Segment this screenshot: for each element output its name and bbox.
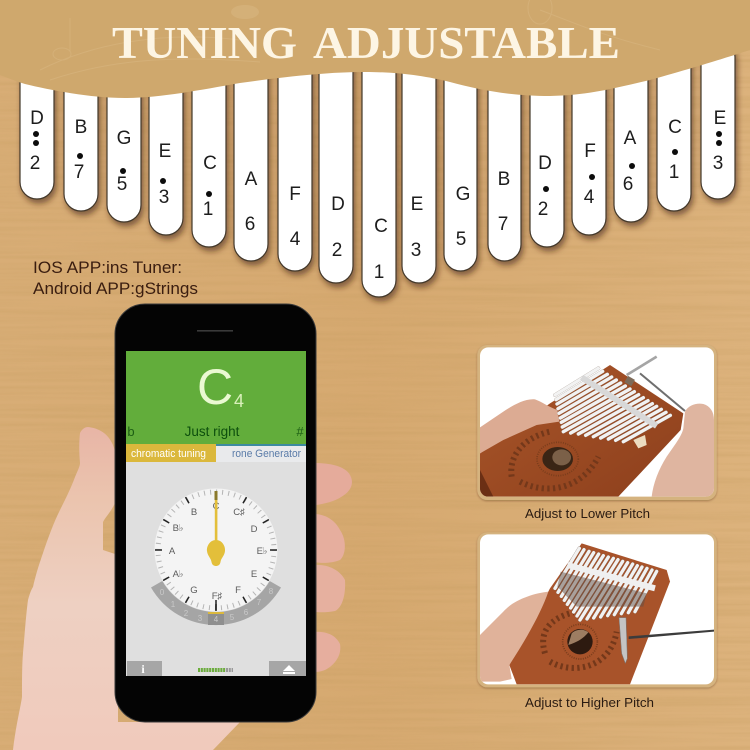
- tuning dial: F: [235, 585, 241, 596]
- palm and thumb: [13, 427, 240, 750]
- key F 4 dotted: [572, 40, 606, 235]
- key E 3: 3: [411, 240, 421, 261]
- key A 6 dotted: [614, 40, 648, 222]
- key A 6: A: [245, 169, 258, 190]
- key D 2 dotted: 2: [538, 199, 548, 220]
- key G 5: [444, 40, 477, 271]
- key E 3: [402, 40, 436, 283]
- octave scale arc: 5: [230, 613, 235, 622]
- kalimba body: [509, 543, 670, 684]
- title: [112, 17, 620, 68]
- info button: i: [141, 662, 145, 676]
- tuning dial: A♭: [173, 569, 183, 580]
- octave scale arc: 3: [198, 614, 203, 623]
- caption: higher pitch: Adjust to Higher Pitch: [525, 696, 654, 710]
- tuning wrench: [619, 618, 714, 663]
- key C 1: 1: [203, 199, 213, 220]
- wreath and sound hole: [511, 432, 598, 489]
- tuning dial: B♭: [173, 523, 183, 534]
- banner music staff decoration: [40, 0, 660, 80]
- key D 2: [319, 40, 353, 283]
- key G 5: 5: [117, 174, 127, 195]
- key G 5: 5: [456, 229, 466, 250]
- title: TUNING: [112, 17, 297, 68]
- key F 4: 4: [290, 229, 301, 250]
- octave scale arc: 2: [184, 609, 189, 618]
- finger 2: [314, 514, 345, 563]
- right hand: [652, 404, 714, 497]
- key A 6: [234, 40, 268, 261]
- key C 1 centre: [362, 40, 396, 297]
- key B 7: [488, 40, 521, 261]
- level meter: [198, 668, 233, 672]
- key A 6 dotted: 6: [623, 174, 633, 195]
- key B 7: 7: [498, 214, 508, 235]
- key B 7: B: [498, 169, 510, 190]
- octave scale arc: 4: [214, 615, 219, 624]
- key E 3: [149, 40, 183, 235]
- mode tabs: [126, 444, 306, 462]
- tuning dial: E: [251, 569, 257, 580]
- key E 3: E: [159, 141, 171, 162]
- tines: [555, 368, 670, 448]
- octave scale arc: 1: [171, 600, 176, 609]
- key F 4: F: [289, 184, 301, 205]
- key F 4 dotted: 4: [584, 187, 595, 208]
- tuner note panel: Just right: [185, 424, 240, 439]
- key D 2 high: [20, 40, 54, 199]
- tuner note panel: C: [197, 359, 233, 415]
- kalimba body: [480, 365, 683, 497]
- key D 2: 2: [332, 240, 342, 261]
- wreath and sound hole: [543, 612, 617, 668]
- hand: [480, 592, 548, 682]
- title: ADJUSTABLE: [313, 17, 620, 68]
- key F 4: [278, 40, 312, 271]
- app names text: Android APP:gStrings: [33, 280, 198, 298]
- info button: [127, 661, 162, 676]
- app names text: IOS APP:ins Tuner:: [33, 259, 182, 277]
- key C 1: [192, 40, 226, 247]
- tuner note panel: #: [296, 424, 304, 439]
- tuning dial: C: [213, 501, 220, 512]
- key C 1: C: [203, 153, 217, 174]
- octave scale arc: 7: [257, 598, 262, 607]
- key D 2: D: [331, 194, 345, 215]
- tuning dial: G: [190, 585, 198, 596]
- caption: lower pitch: Adjust to Lower Pitch: [525, 507, 650, 521]
- key D 2 high: D: [30, 108, 44, 129]
- finger 4: [314, 632, 340, 672]
- key E 3 double dotted: [701, 40, 735, 199]
- key B 7: [64, 40, 98, 211]
- octave scale arc: 8: [269, 587, 274, 596]
- photo card: adjust to lower pitch: [477, 345, 717, 500]
- finger 1: [314, 463, 352, 505]
- left hand: [480, 399, 559, 453]
- key C 1 centre: C: [374, 216, 388, 237]
- tuner note panel: 4: [234, 391, 244, 411]
- key D 2 high: 2: [30, 153, 40, 174]
- tuning dial: A: [169, 546, 176, 557]
- finger 3: [314, 565, 345, 612]
- needle: [207, 491, 225, 566]
- key C 1 dotted: [657, 40, 691, 211]
- key A 6: 6: [245, 214, 255, 235]
- key F 4 dotted: F: [584, 141, 596, 162]
- octave scale arc: [151, 581, 281, 625]
- wavy title banner: [0, 0, 750, 98]
- tuning dial: E♭: [257, 546, 267, 557]
- key A 6 dotted: A: [624, 128, 637, 149]
- key D 2 dotted: D: [538, 153, 552, 174]
- speaker: [197, 330, 233, 332]
- tuning dial: F♯: [212, 591, 223, 602]
- key C 1 dotted: 1: [669, 162, 679, 183]
- key G 5: G: [117, 128, 131, 149]
- mode tabs: rone Generator: [232, 448, 301, 460]
- hand holding phone: [13, 427, 352, 750]
- tuner note panel: b: [127, 424, 135, 439]
- smartphone: [115, 304, 316, 722]
- octave scale arc: 6: [244, 608, 249, 617]
- kalimba key chart: [20, 40, 735, 297]
- key B 7: B: [75, 117, 87, 138]
- key C 1 centre: 1: [374, 262, 384, 283]
- phone body: [115, 304, 316, 722]
- tines: [555, 548, 657, 620]
- tuning dial: [154, 488, 278, 612]
- tuning wrench: [624, 357, 685, 411]
- key B 7: 7: [74, 162, 84, 183]
- up button: [269, 661, 306, 676]
- key G 5: G: [456, 184, 470, 205]
- key C 1 dotted: C: [668, 117, 682, 138]
- mode tabs: chromatic tuning: [131, 448, 206, 460]
- photo card: adjust to higher pitch: [477, 532, 717, 687]
- tuning dial: D: [251, 524, 258, 535]
- key E 3: E: [411, 194, 423, 215]
- key E 3 double dotted: E: [714, 108, 726, 129]
- tuner note panel: [126, 351, 306, 444]
- key E 3: 3: [159, 187, 169, 208]
- key D 2 dotted: [530, 40, 564, 247]
- key G 5: [107, 40, 141, 222]
- screen: [126, 351, 306, 676]
- tuning dial: B: [191, 507, 197, 518]
- key E 3 double dotted: 3: [713, 153, 723, 174]
- tuning dial: C♯: [233, 507, 245, 518]
- octave scale arc: 0: [160, 588, 165, 597]
- app names text: [33, 259, 198, 298]
